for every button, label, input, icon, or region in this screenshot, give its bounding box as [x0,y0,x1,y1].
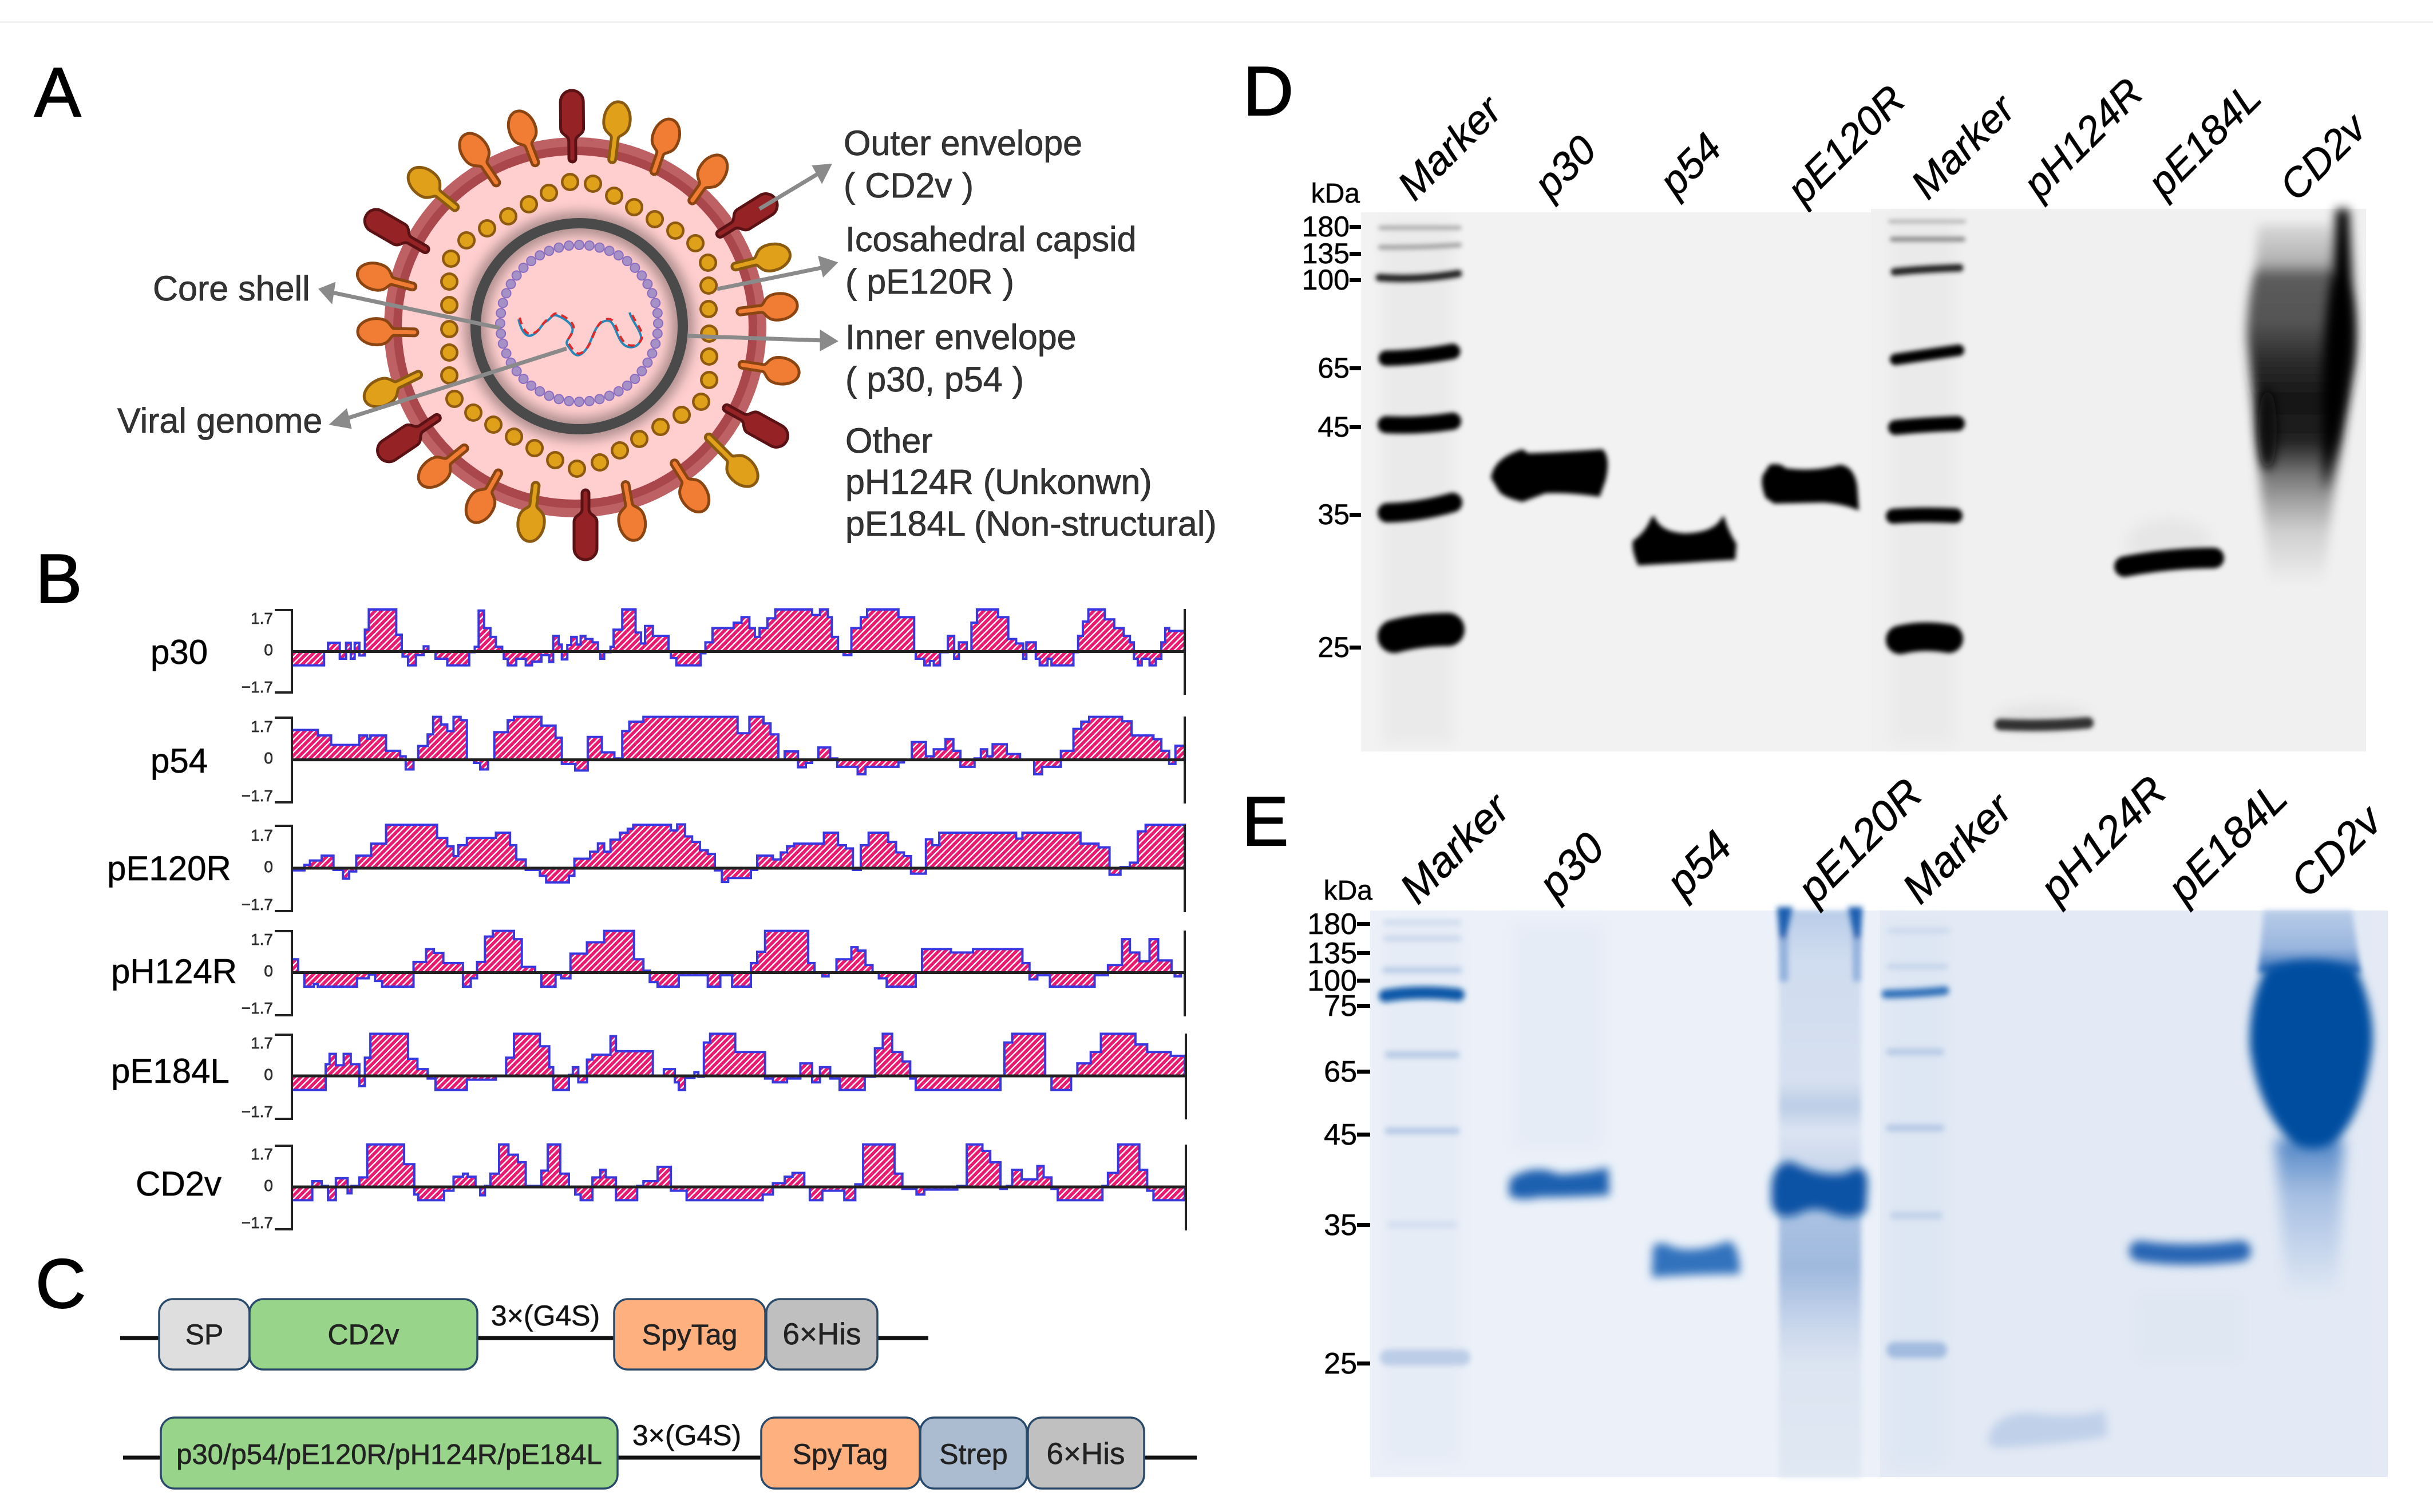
domain: SpyTag [614,1299,765,1369]
panel E: molecular weight ladder: 65 [1324,1055,1357,1089]
marker bands left [1385,923,1462,1357]
domain: Strep: Strep [939,1438,1008,1470]
panel letter A: A [34,53,81,131]
panel E: coomassie gel [1370,907,2388,1477]
band: p54 [1652,1241,1740,1277]
domain: SpyTag: SpyTag [642,1319,737,1351]
panel D: lane labels: Marker [1902,85,2025,208]
panel B: hydropathy plot CD2v [136,1145,1186,1232]
panel C: antigen construct [123,1418,1197,1489]
arrow: core shell [322,285,500,328]
domain: SP [159,1299,250,1369]
panel E: lane labels: pE184L [2157,773,2296,913]
domain: antigens: p30/p54/pE120R/pH124R/pE184L [176,1439,602,1470]
panel E: molecular weight ladder [1307,876,1372,1380]
panel letter C: C [35,1245,86,1323]
band: pH124R [2000,723,2088,725]
label: pE120R: ( pE120R ) [845,262,1014,301]
panel D: molecular weight ladder: 65 [1318,352,1350,384]
panel E: molecular weight ladder: 180 [1307,908,1357,941]
panel B: hydropathy plot CD2v: CD2v [136,1165,221,1203]
blot lane smears [1382,217,2212,744]
marker bands right [1890,221,1964,640]
label: CD2v: ( CD2v ) [844,166,974,205]
panel B: hydropathy plot p30: p30 [151,633,208,671]
domain: SpyTag: SpyTag [793,1438,888,1470]
panel D: molecular weight ladder [1302,179,1361,663]
smear: CD2v [2250,911,2373,1299]
lane: pE120R smear [1779,911,1861,1477]
arrow: icosahedral capsid [717,259,834,289]
panel B: hydropathy plot pE120R: pE120R [107,849,231,888]
domain: 6×His [766,1299,877,1369]
panel D: lane labels: p30 [1525,127,1605,208]
band: p30 [1509,1167,1609,1199]
panel E: lane labels [1390,766,2392,913]
label: icosahedral capsid: Icosahedral capsid [845,220,1137,259]
panel D: molecular weight ladder: kDa [1311,179,1360,209]
panel B: hydropathy plot pH124R: 0 [264,962,273,980]
arrow: inner envelope [688,333,834,348]
band: pH124R [1988,1410,2108,1448]
band: p30 [1491,449,1608,502]
panel B: hydropathy plot pH124R: 1.7 [251,931,273,948]
panel E: molecular weight ladder: 45 [1324,1118,1357,1151]
panel D: molecular weight ladder: 180 [1302,211,1350,243]
panel E: lane labels: Marker [1893,783,2023,912]
panel A: virus diagram [354,90,801,560]
panel E: molecular weight ladder: 75 [1324,989,1357,1023]
band: pE120R [1762,464,1859,510]
linker label: 3×(G4S) [491,1300,600,1332]
panel letter E: E [1242,782,1288,860]
panel D: molecular weight ladder: 45 [1318,411,1350,443]
panel B: hydropathy plot pE184L: −1.7 [242,1103,273,1121]
panel E: molecular weight ladder: 135 [1307,937,1357,970]
panel B: hydropathy plot p30: 0 [264,641,273,659]
panel B: hydropathy plot p54: p54 [151,742,208,780]
panel D: lane labels: pE120R [1778,77,1914,213]
label: p30 p54: ( p30, p54 ) [845,360,1024,399]
band: pE184L [2139,1251,2241,1254]
panel B: hydropathy plot pE120R: −1.7 [242,896,273,913]
CD2v surface spikes [354,90,801,560]
panel E: lane labels: p54 [1656,821,1741,907]
domain: 6×His: 6×His [1047,1437,1125,1471]
panel B: hydropathy plot pE120R [107,824,1185,913]
domain: CD2v [250,1299,477,1369]
panel B: hydropathy plot p30: 1.7 [251,609,273,627]
panel D: molecular weight ladder: 25 [1318,631,1350,663]
panel B: hydropathy plot pE184L [111,1034,1186,1121]
domain: SP: SP [185,1319,223,1351]
band: pE120R [1771,1162,1868,1217]
band: pE184L [2125,558,2214,567]
panel B: hydropathy plot CD2v: −1.7 [242,1214,273,1232]
panel E: molecular weight ladder: 35 [1324,1209,1357,1242]
panel B: hydropathy plot CD2v: 1.7 [251,1145,273,1163]
panel E: molecular weight ladder: 100 [1307,964,1357,998]
domain: CD2v: CD2v [327,1319,399,1351]
panel D: lane labels: CD2v [2271,104,2376,209]
panel B: hydropathy plot p30 [151,609,1185,696]
panel B: hydropathy plot pH124R: −1.7 [242,999,273,1017]
domain: Strep [920,1418,1027,1489]
label: viral genome: Viral genome [117,401,322,440]
label: core shell: Core shell [153,269,310,308]
panel B: hydropathy plot pE120R: 0 [264,858,273,876]
gel lane smears [1382,921,2244,1465]
label: outer envelope: Outer envelope [844,124,1082,163]
panel B: hydropathy plot CD2v: 0 [264,1177,273,1194]
label: pH124R: pH124R (Unkonwn) [845,462,1152,501]
panel E: lane labels: pE120R [1787,769,1932,913]
viral genome strands [519,311,642,355]
domain: antigens [161,1418,618,1489]
panel D: lane labels: pE184L [2138,74,2270,207]
panel B: hydropathy plot p30: −1.7 [242,678,273,696]
panel E: lane labels: CD2v [2281,794,2392,906]
arrow: viral genome [333,349,567,426]
band: p54 [1632,516,1736,565]
marker bands left [1379,228,1459,636]
label: inner envelope: Inner envelope [845,318,1077,357]
inner envelope glow and ring [476,223,683,429]
panel D: lane labels [1389,70,2376,213]
domain: SpyTag [761,1418,920,1489]
panel B: hydropathy plot p54: −1.7 [242,787,273,805]
panel B: hydropathy plot pH124R: pH124R [111,952,237,991]
icosahedral capsid dots [449,182,709,469]
domain: 6×His: 6×His [783,1317,861,1351]
domain: 6×His [1028,1418,1144,1489]
panel D: western blot [1361,209,2366,751]
label: other: Other [845,421,933,460]
panel E: lane labels: Marker [1390,783,1520,912]
panel D: lane labels: pH124R [2014,70,2152,208]
arrow: outer envelope [759,166,829,209]
panel B: hydropathy plot p54 [151,717,1185,805]
label: pE184L: pE184L (Non-structural) [845,504,1217,543]
panel B: hydropathy plot pE184L: 0 [264,1066,273,1083]
panel B: hydropathy plot pE120R: 1.7 [251,826,273,844]
band: pE120R top edge [1777,907,1862,981]
panel D: lane labels: p54 [1650,125,1731,205]
marker bands right [1886,931,1949,1350]
panel D: lane labels: Marker [1389,86,1512,209]
panel E: molecular weight ladder: kDa [1324,876,1372,906]
panel D: molecular weight ladder: 35 [1318,498,1350,531]
smear: CD2v [2247,209,2355,584]
panel D: molecular weight ladder: 100 [1302,264,1350,296]
core shell purple beads [500,245,658,402]
panel D: molecular weight ladder: 135 [1302,238,1350,270]
panel B: hydropathy plot p54: 1.7 [251,718,273,735]
panel E: lane labels: pH124R [2030,766,2175,913]
panel B: hydropathy plot pE184L: 1.7 [251,1034,273,1052]
linker label: 3×(G4S) [632,1419,741,1451]
panel letter D: D [1243,52,1293,130]
outer envelope membrane [384,137,766,517]
panel E: molecular weight ladder: 25 [1324,1347,1357,1380]
panel B: hydropathy plot pE184L: pE184L [111,1052,230,1090]
panel B: hydropathy plot pH124R [111,931,1185,1017]
panel C: CD2v construct [120,1299,928,1369]
panel B: hydropathy plot p54: 0 [264,749,273,767]
panel letter B: B [35,540,82,618]
panel E: lane labels: p30 [1528,823,1613,909]
